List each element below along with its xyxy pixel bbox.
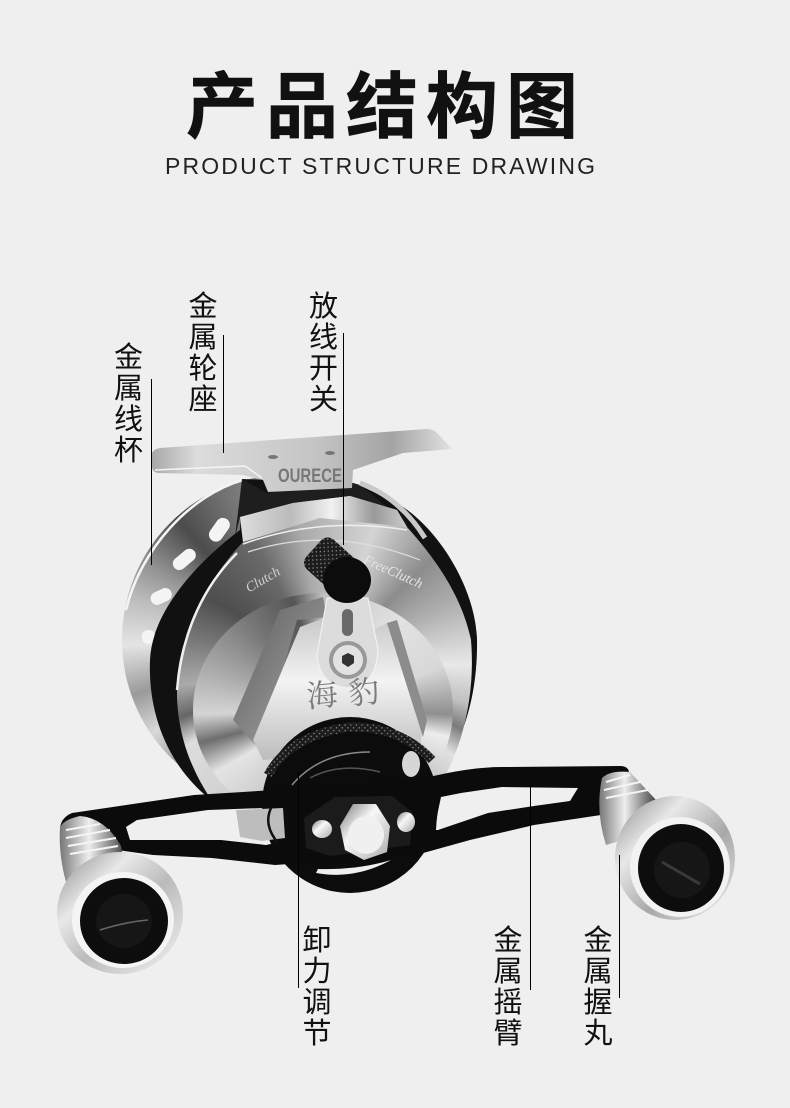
line release switch knob (300, 534, 371, 603)
central lever with slot and screw (317, 598, 378, 688)
callout: 金属线杯: 金 (114, 341, 143, 374)
inner face left bevel (233, 597, 327, 750)
callout: 放线开关 (309, 290, 344, 545)
callout: 金属握丸: 丸 (583, 1017, 613, 1050)
clutch label: Clutch (243, 565, 283, 596)
reel: front frame plate (177, 496, 472, 794)
callout: 金属摇臂: 金 (493, 924, 523, 957)
callout: 放线开关: 放 (309, 290, 338, 323)
brand characters on face: 海 (304, 669, 340, 717)
callout: 放线开关: 关 (309, 383, 338, 416)
handle arm (60, 766, 629, 865)
callout: 卸力调节: 调 (302, 987, 332, 1019)
callout: 金属握丸 (583, 855, 620, 1050)
callout: 金属线杯: 线 (114, 403, 143, 436)
left grip knob (57, 816, 183, 974)
inner face right bevel (387, 620, 427, 737)
callout: 金属轮座: 座 (188, 383, 218, 416)
callout: 金属轮座: 属 (188, 322, 218, 354)
callout: 金属线杯: 杯 (114, 434, 143, 467)
callout: 放线开关: 开 (309, 353, 338, 385)
handle hub (298, 790, 438, 862)
inner face triangle (253, 617, 423, 760)
callout: 卸力调节: 力 (302, 955, 332, 988)
brand characters on face: 豹 (346, 666, 381, 714)
frame top band (240, 496, 407, 542)
reel: rear metal spool (122, 475, 448, 805)
callout: 卸力调节: 卸 (302, 924, 332, 957)
callout: 卸力调节: 节 (302, 1017, 332, 1050)
callout: 金属摇臂: 臂 (493, 1017, 523, 1050)
reel seat bracket (152, 429, 452, 492)
mechanism seen through arm opening (236, 808, 285, 843)
drag adjustment wheel (262, 717, 438, 893)
right grip knob (599, 772, 735, 920)
callout: 金属握丸: 金 (583, 924, 613, 957)
subtitle: PRODUCT STRUCTURE DRAWING (165, 153, 595, 179)
callout: 金属轮座: 金 (188, 290, 218, 323)
callout: 金属握丸: 属 (583, 956, 613, 988)
callout: 金属轮座 (188, 290, 224, 453)
callout: 金属握丸: 握 (583, 986, 613, 1019)
reel: recessed inner face (193, 593, 453, 827)
reel: spool holes and black line groove (125, 479, 478, 794)
brand characters on face (304, 666, 381, 717)
callout: 金属线杯 (114, 341, 152, 565)
callout: 金属摇臂 (493, 785, 531, 1050)
callout: 金属轮座: 轮 (188, 352, 218, 385)
reel: details, handle and knobs (57, 429, 735, 974)
callout: 金属摇臂: 摇 (493, 986, 523, 1019)
reel seat bracket: OURECE (278, 466, 342, 487)
free clutch label: FreeClutch (360, 552, 425, 592)
callout: 卸力调节 (298, 772, 332, 1050)
frame highlights (177, 525, 420, 690)
title: 产品结构图 (186, 48, 578, 153)
callout: 放线开关: 线 (309, 321, 338, 354)
callout: 金属摇臂: 属 (493, 956, 523, 988)
fishing reel illustration (57, 429, 735, 974)
callout: 金属线杯: 属 (114, 373, 143, 405)
